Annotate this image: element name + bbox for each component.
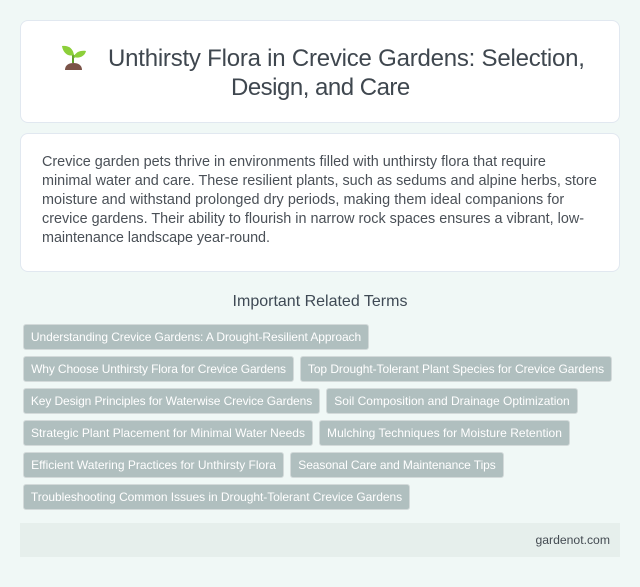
heading: related terms: Important Related Terms	[233, 293, 407, 310]
tag 6: Strategic Plant Placement for Minimal Water Needs	[31, 426, 305, 440]
tag 8: Efficient Watering Practices for Unthirsty Flora	[31, 458, 276, 472]
tag 1: Understanding Crevice Gardens: A Drought-Resilient Approach	[31, 330, 361, 344]
footer bar	[20, 523, 620, 557]
tag 1	[23, 324, 369, 350]
tag 7	[319, 420, 570, 446]
paragraph line 3: moisture and withstand prolonged dry periods, making them ideal companions for	[42, 192, 564, 208]
paragraph line 4: crevice gardens. Their ability to flourish in narrow rock spaces ensures a vibrant, low-	[42, 211, 584, 227]
title line 1: Unthirsty Flora in Crevice Gardens: Selection,	[108, 45, 585, 72]
tag 4: Key Design Principles for Waterwise Crevice Gardens	[31, 394, 312, 408]
tag 2: Why Choose Unthirsty Flora for Crevice Gardens	[31, 362, 286, 376]
tag 4	[23, 388, 320, 414]
paragraph line 5: maintenance landscape year-round.	[42, 230, 270, 246]
tag 3	[300, 356, 612, 382]
title line 2: Design, and Care	[231, 74, 410, 101]
tag 9	[290, 452, 504, 478]
tag 2	[23, 356, 294, 382]
paragraph line 2: minimal water and care. These resilient plants, such as sedums and alpine herbs, store	[42, 173, 597, 189]
icon: seedling	[62, 46, 86, 70]
tag 7: Mulching Techniques for Moisture Retention	[327, 426, 562, 440]
panel: title card	[20, 20, 620, 123]
footer site name: gardenot.com	[535, 533, 610, 547]
tag 5: Soil Composition and Drainage Optimization	[334, 394, 570, 408]
tag 3: Top Drought-Tolerant Plant Species for Crevice Gardens	[308, 362, 604, 376]
tag 5	[326, 388, 578, 414]
tag 8	[23, 452, 284, 478]
tag 9: Seasonal Care and Maintenance Tips	[298, 458, 496, 472]
tag 10	[23, 484, 410, 510]
tag 10: Troubleshooting Common Issues in Drought-Tolerant Crevice Gardens	[31, 490, 402, 504]
panel: intro paragraph	[20, 133, 620, 272]
paragraph line 1: Crevice garden pets thrive in environments filled with unthirsty flora that require	[42, 154, 546, 170]
tag 6	[23, 420, 313, 446]
